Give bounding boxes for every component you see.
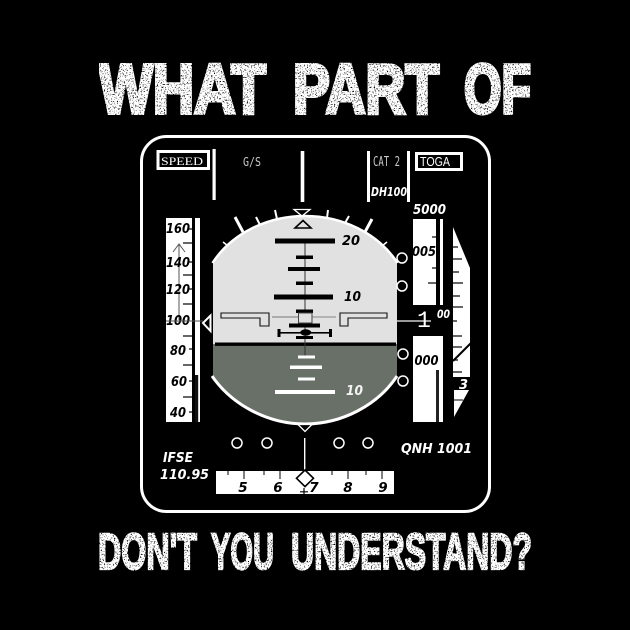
bank pointer triangles xyxy=(294,210,311,228)
marker circles xyxy=(232,253,408,448)
localizer pointer xyxy=(298,424,312,470)
speed annunciator xyxy=(158,152,208,168)
heading scale: 6 xyxy=(273,480,283,496)
sky xyxy=(213,216,397,345)
panel: primary flight display xyxy=(142,136,490,512)
label: QNH 1001: QNH 1001 xyxy=(401,442,472,457)
speed labels: 40 xyxy=(169,405,186,421)
heading scale xyxy=(216,470,394,496)
top divider bars xyxy=(212,149,410,202)
title: what part of: WHAT xyxy=(99,50,266,128)
title: what part of: OF xyxy=(464,50,531,128)
title: don't you understand xyxy=(98,523,532,580)
ground xyxy=(213,344,397,424)
label: IFSE frequency: IFSE xyxy=(163,451,193,466)
pitch labels: 10 xyxy=(344,289,361,305)
heading scale: 7 xyxy=(309,480,319,496)
speed labels: 160 xyxy=(166,221,190,237)
altitude readout xyxy=(397,307,450,334)
vertical speed ladder: 3 xyxy=(459,378,468,393)
heading scale: 8 xyxy=(343,480,353,496)
lower altitude tape xyxy=(413,336,443,422)
label: DH100: DH100 xyxy=(371,185,407,199)
title: don't you understand: DON'T xyxy=(98,523,197,580)
horizon line xyxy=(215,342,396,346)
upper altitude tape: 005 xyxy=(412,244,436,260)
speed arrow xyxy=(173,244,185,320)
speed tape xyxy=(166,218,210,422)
centre line xyxy=(304,241,306,358)
speed index xyxy=(166,320,203,322)
heading scale: 5 xyxy=(238,480,248,496)
speed tape ticks xyxy=(183,229,192,412)
upper pitch bars xyxy=(274,238,335,313)
lower altitude tape: 000 xyxy=(414,353,438,369)
plus mark xyxy=(300,488,308,494)
speed labels: 60 xyxy=(171,374,187,390)
heading scale: 9 xyxy=(378,480,388,496)
panel frame xyxy=(142,136,490,512)
altitude readout: 1 xyxy=(417,308,431,334)
ground outline xyxy=(212,376,397,424)
pitch labels: 20 xyxy=(342,233,360,249)
label: G/S: G/S xyxy=(243,155,261,169)
toga annunciator xyxy=(416,154,462,170)
speed labels: 140 xyxy=(166,255,190,271)
upper altitude tape xyxy=(412,219,443,305)
speed labels xyxy=(166,221,190,421)
lower pitch bars xyxy=(275,356,335,394)
speed labels: 100 xyxy=(166,313,190,329)
sky outline xyxy=(212,216,398,263)
attitude indicator xyxy=(212,216,398,424)
speed labels: 80 xyxy=(170,343,186,359)
title: what part of: PART xyxy=(293,50,439,128)
speed labels: 120 xyxy=(166,282,190,298)
title: don't you understand: YOU xyxy=(211,523,274,580)
title: what part of xyxy=(99,50,531,128)
label: CAT 2: CAT 2 xyxy=(373,155,400,170)
toga annunciator: TOGA xyxy=(420,155,451,169)
pitch labels: 10 xyxy=(346,383,363,399)
altitude readout: 00 xyxy=(437,307,450,321)
bank scale ticks xyxy=(223,210,387,246)
heading diamond xyxy=(296,470,314,487)
vertical speed ladder xyxy=(453,227,471,417)
altitude label 5000: 5000 xyxy=(413,202,446,218)
pitch labels xyxy=(342,233,363,399)
aircraft symbol xyxy=(221,313,387,339)
label: IFSE frequency xyxy=(160,451,209,483)
label: IFSE frequency: 110.95 xyxy=(160,468,209,483)
speed annunciator: SPEED xyxy=(161,154,203,168)
